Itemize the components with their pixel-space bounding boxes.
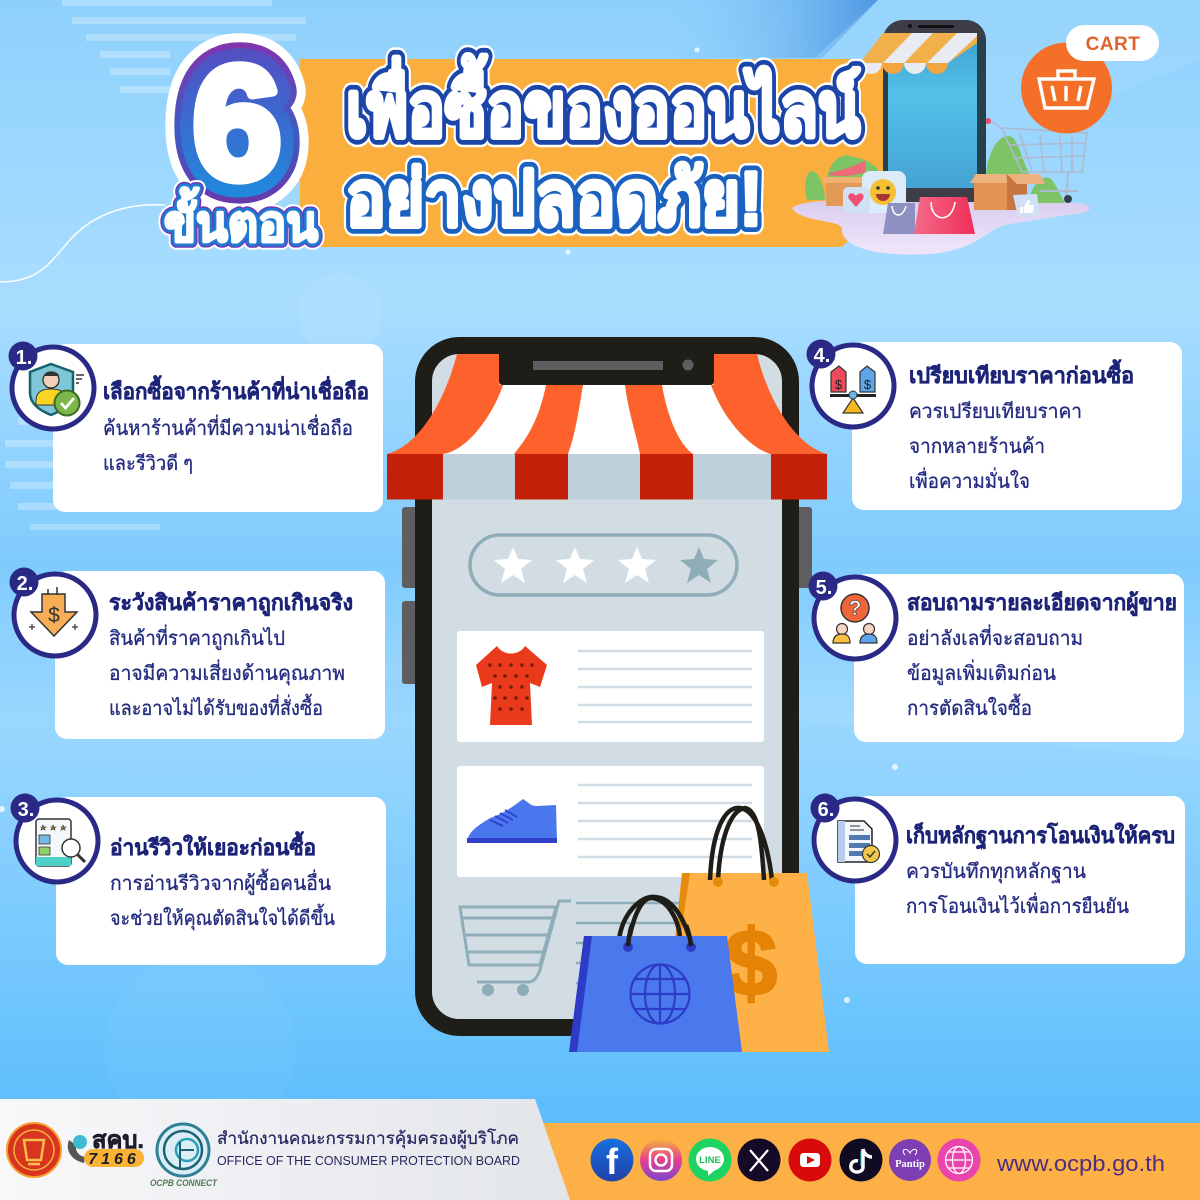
title steps label: ขั้นตอน: [164, 187, 318, 252]
body text: อาจมีความเสี่ยงด้านคุณภาพ: [109, 659, 345, 686]
number badge: [8, 342, 38, 370]
panel: step 6: [810, 794, 1185, 964]
card: [854, 574, 1184, 742]
star rating pill: [470, 535, 737, 595]
title line 2: อย่างปลอดภัย!: [346, 157, 762, 242]
title number 6: 6: [193, 33, 281, 212]
title number 6: 6: [193, 33, 281, 212]
icon: price comparison scale: $: [835, 377, 843, 392]
title orange band: [300, 59, 890, 247]
title line 1: เพื่อซื้อของออนไลน์: [346, 54, 861, 153]
number badge: 1.: [16, 347, 32, 369]
website address: www.ocpb.go.th: [996, 1151, 1165, 1176]
icon: website: [938, 1138, 980, 1182]
pink bag: [914, 197, 975, 234]
shop awning: [387, 354, 827, 500]
icon: verified shop person: [12, 347, 94, 429]
icon: question and two people: ?: [849, 597, 861, 620]
title line 2: อย่างปลอดภัย!: [346, 157, 762, 242]
heading: เก็บหลักฐานการโอนเงินให้ครบ: [906, 821, 1175, 850]
shoe box: [826, 178, 866, 206]
logo: hotline 1166: 7166: [88, 1151, 140, 1168]
organisation name English: OFFICE OF THE CONSUMER PROTECTION BOARD: [217, 1153, 520, 1168]
body text: เพื่อความมั่นใจ: [909, 467, 1030, 493]
card: [855, 796, 1185, 964]
number badge: 2.: [17, 573, 33, 595]
body text: ควรบันทึกทุกหลักฐาน: [906, 861, 1086, 884]
heading: อ่านรีวิวให้เยอะก่อนซื้อ: [110, 831, 316, 860]
heading: สอบถามรายละเอียดจากผู้ขาย: [907, 590, 1177, 617]
blue shopping bag: [569, 897, 742, 1052]
card: [55, 571, 385, 739]
title line 2: อย่างปลอดภัย!: [346, 157, 762, 242]
cart: [985, 118, 1087, 203]
title line 1: เพื่อซื้อของออนไลน์: [346, 54, 861, 153]
body text: [110, 869, 335, 931]
title steps label: ขั้นตอน: [164, 187, 318, 252]
panel: step 2: [10, 568, 385, 739]
icon: tiktok: [840, 1138, 882, 1182]
footer logo panel: [0, 1099, 570, 1200]
body text: จะช่วยให้คุณตัดสินใจได้ดีขึ้น: [110, 904, 335, 931]
body text: ข้อมูลเพิ่มเติมก่อน: [907, 659, 1056, 686]
like tile: [1013, 194, 1040, 217]
icon: line: [688, 1138, 732, 1182]
icon: price drop arrow: [14, 574, 96, 656]
icon: X: [738, 1138, 780, 1182]
top right illustration: online store: [792, 20, 1159, 254]
social icons: [590, 1138, 980, 1182]
store awning: [860, 33, 977, 74]
body text: [909, 401, 1082, 493]
body text: สินค้าที่ราคาถูกเกินไป: [109, 624, 285, 651]
side buttons: [402, 507, 812, 684]
icon: price comparison scale: $: [864, 377, 872, 392]
heading: ระวังสินค้าราคาถูกเกินจริง: [109, 590, 353, 617]
cart label pill: [1066, 25, 1159, 61]
body text: ควรเปรียบเทียบราคา: [909, 401, 1082, 423]
heading: เลือกซื้อจากร้านค้าที่น่าเชื่อถือ: [103, 375, 369, 404]
card: [56, 797, 386, 965]
ground blob: [792, 200, 1090, 254]
number badge: 5.: [816, 577, 832, 599]
footer orange bar: [540, 1123, 1200, 1200]
product card: shoe: [457, 766, 764, 877]
body text: [109, 624, 345, 720]
title steps label: ขั้นตอน: [164, 187, 318, 252]
icon: review tablet: [16, 800, 98, 882]
title number 6: 6: [193, 33, 281, 212]
title line 1: เพื่อซื้อของออนไลน์: [346, 54, 861, 153]
cart label: CART: [1086, 34, 1140, 55]
icon: facebook: [590, 1138, 634, 1182]
body text: การอ่านรีวิวจากผู้ซื้อคนอื่น: [110, 869, 331, 896]
card: [852, 342, 1182, 510]
number badge: 6.: [818, 799, 834, 821]
orange cart circle: [1021, 42, 1112, 134]
icon: price comparison scale: [812, 345, 894, 427]
emoji tile: [862, 171, 906, 213]
body text: และอาจไม่ได้รับของที่สั่งซื้อ: [109, 694, 323, 720]
logo caption: OCPB CONNECT: [150, 1178, 218, 1188]
body text: [906, 861, 1129, 918]
panel: step 3: [10, 794, 386, 965]
number badge: [806, 340, 836, 368]
organisation name Thai: สำนักงานคณะกรรมการคุ้มครองผู้บริโภค: [217, 1128, 519, 1149]
body text: และรีวิวดี ๆ: [103, 453, 193, 475]
icon: instagram: [640, 1139, 682, 1181]
body text: การโอนเงินไว้เพื่อการยืนยัน: [906, 892, 1129, 918]
basket icon: [1039, 71, 1094, 108]
number badge: [10, 794, 40, 822]
number badge: [10, 568, 38, 596]
logo: government seal: [7, 1123, 61, 1177]
central phone illustration: [387, 346, 829, 1052]
number badge: [808, 572, 838, 600]
panel: step 4: [806, 340, 1182, 510]
store phone: [883, 20, 986, 200]
product card: shirt: [457, 631, 764, 742]
icon: youtube: [788, 1138, 832, 1182]
body text: [907, 624, 1083, 720]
logo: OCPB: [157, 1124, 209, 1176]
title steps label: ขั้นตอน: [164, 187, 318, 252]
panel: step 1: [8, 342, 383, 512]
number badge: [810, 794, 840, 822]
logo: hotline 1166: สคบ.: [92, 1127, 144, 1154]
number badge: 3.: [18, 799, 34, 821]
icon: pantip: [889, 1139, 931, 1181]
body text: จากหลายร้านค้า: [909, 436, 1045, 458]
purple bag: [883, 203, 915, 234]
icon: question and two people: [814, 577, 896, 659]
icon: price drop arrow: $: [48, 604, 60, 627]
plants: [805, 136, 1065, 203]
orange shopping bag: [670, 808, 829, 1052]
orange shopping bag: $: [725, 910, 777, 1015]
body text: อย่าลังเลที่จะสอบถาม: [907, 624, 1083, 650]
panel: step 5: [808, 572, 1184, 742]
icon: transfer document: [814, 799, 896, 881]
phone body: [424, 346, 790, 1028]
body text: การตัดสินใจซื้อ: [907, 694, 1032, 720]
logo: hotline 1166: [68, 1127, 144, 1168]
notch: [499, 350, 714, 385]
icon: facebook: f: [606, 1141, 619, 1182]
cart icon: [460, 901, 750, 996]
body text: [103, 414, 353, 475]
icon: line: LINE: [699, 1155, 721, 1166]
parcel box: [974, 175, 1027, 210]
number badge: 4.: [814, 345, 830, 367]
body text: ค้นหาร้านค้าที่มีความน่าเชื่อถือ: [103, 414, 353, 440]
card: [53, 344, 383, 512]
heart tile: [843, 187, 870, 213]
icon: pantip: Pantip: [895, 1159, 925, 1170]
title number 6: 6: [193, 33, 281, 212]
heading: เปรียบเทียบราคาก่อนซื้อ: [909, 359, 1134, 388]
